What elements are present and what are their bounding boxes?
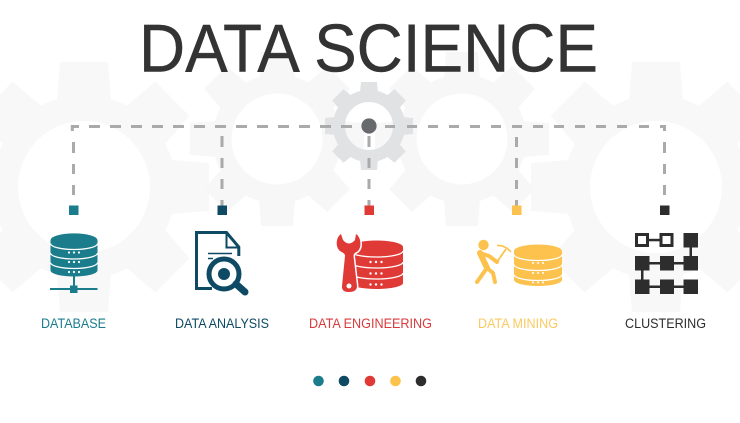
marker: data analysis (218, 206, 227, 215)
title: DATA SCIENCE (139, 10, 598, 86)
background gear: centre left (190, 52, 364, 226)
marker: data engineering (364, 206, 374, 215)
dashed connector network (72, 126, 665, 206)
icon: database (50, 233, 98, 293)
central small gear (325, 82, 413, 170)
marker: data mining (512, 206, 522, 215)
background gear: centre right (375, 52, 549, 226)
label: data mining: DATA MINING (478, 316, 558, 331)
label: database: DATABASE (41, 316, 106, 331)
label: data analysis: DATA ANALYSIS (175, 316, 269, 331)
label: clustering: CLUSTERING (625, 316, 706, 331)
icon: data mining (477, 240, 562, 286)
pagination dots (313, 376, 426, 386)
icon: data engineering (337, 234, 403, 292)
label: data engineering: DATA ENGINEERING (309, 316, 432, 331)
icon: clustering (635, 233, 698, 294)
icon: data analysis (196, 232, 245, 292)
background gear: far right (531, 62, 740, 312)
background gear: far left (0, 62, 209, 312)
marker: database (69, 206, 78, 215)
central hub dot (361, 118, 377, 134)
marker: clustering (660, 206, 670, 215)
